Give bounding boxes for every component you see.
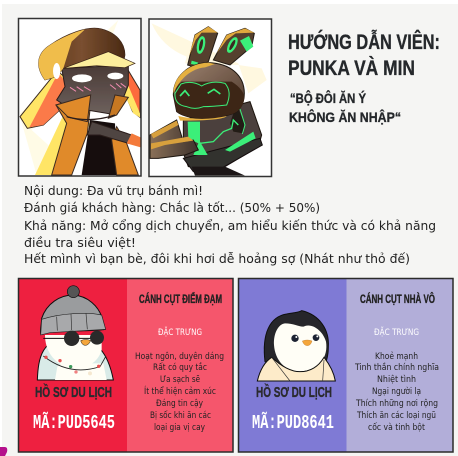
traits list: ĐẶC TRƯNG [158, 326, 202, 338]
right ear [125, 67, 140, 117]
traits list: Ngại người lạ [372, 386, 421, 397]
green body lines [188, 122, 208, 155]
visor [63, 52, 135, 68]
ear tag [53, 63, 60, 79]
icon: penguin with beanie [37, 286, 113, 380]
traits list: Ít thể hiện cảm xúc [144, 385, 216, 397]
lights [43, 356, 106, 370]
description text: Hết mình vì bạn bè, đôi khi hơi dễ hoảng sợ (Nhát như thỏ đế) [24, 251, 410, 266]
smile eyes [180, 89, 220, 96]
description text: điều tra siêu việt! [24, 235, 136, 250]
panel: purple profile card [238, 278, 453, 452]
code label: MÃ:PUD5645 [33, 412, 115, 434]
panel: Min robot portrait [149, 19, 272, 176]
code label: HỒ SƠ DU LỊCH [35, 383, 112, 401]
description text: Đánh giá khách hàng: Chắc là tốt... (50% + 50%) [24, 200, 320, 215]
subtitle: “BỘ ĐÔI ĂN Ý [290, 89, 367, 106]
traits list: Thích những nơi rộng [355, 398, 438, 409]
body [183, 102, 262, 167]
traits list: Khoẻ mạnh [375, 351, 418, 362]
code label: MÃ:PUD8641 [252, 412, 334, 434]
subtitle [289, 89, 401, 125]
traits list: Đáng tin cậy [156, 399, 204, 409]
blush [70, 83, 126, 91]
coat yellow side [35, 115, 90, 175]
traits list: Rất có quy tắc [153, 362, 207, 373]
description text [24, 183, 436, 266]
coat orange [52, 95, 92, 175]
title [288, 30, 440, 80]
traits list: cốc và tinh bột [368, 422, 425, 433]
code label [33, 383, 115, 434]
traits list: Ưa sạch sẽ [160, 375, 200, 385]
panel: red profile card [18, 278, 233, 452]
ears [188, 27, 218, 67]
belt [67, 115, 115, 120]
code label: HỒ SƠ DU LỊCH [256, 383, 332, 401]
traits list: ĐẶC TRƯNG [374, 326, 419, 338]
subtitle: KHÔNG ĂN NHẬP“ [289, 108, 401, 125]
traits list: loại gia vị cay [154, 423, 206, 433]
arms [150, 120, 198, 158]
icon: penguin in robe [257, 311, 335, 381]
traits list: Nhiệt tình [377, 374, 416, 385]
black body [82, 120, 117, 175]
glow [20, 20, 118, 175]
traits list: Thích ăn các loại ngũ [356, 411, 436, 421]
arm [87, 122, 132, 143]
traits list: Bị sốc khi ăn các [150, 410, 211, 421]
description text: Khả năng: Mở cổng dịch chuyển, am hiểu kiến thức và có khả năng [24, 218, 436, 233]
glow [152, 23, 267, 93]
code label [252, 383, 334, 434]
description text: Nội dung: Đa vũ trụ bánh mì! [24, 183, 203, 198]
visor line [175, 82, 229, 108]
face [57, 65, 128, 115]
hat [39, 28, 125, 80]
panel: Punka portrait [18, 18, 141, 176]
sunglasses [43, 337, 91, 340]
head [173, 63, 244, 119]
traits list [135, 293, 224, 433]
eyes [72, 74, 92, 82]
title: PUNKA VÀ MIN [288, 57, 415, 80]
left ear [20, 71, 72, 128]
traits list [354, 293, 439, 433]
traits list: CÁNH CỤT ĐIỂM ĐẠM [139, 293, 222, 306]
traits list: Tinh thần chính nghĩa [354, 362, 439, 373]
traits list: Hoạt ngôn, duyên dáng [135, 351, 224, 362]
decorative corner mark [0, 447, 7, 456]
